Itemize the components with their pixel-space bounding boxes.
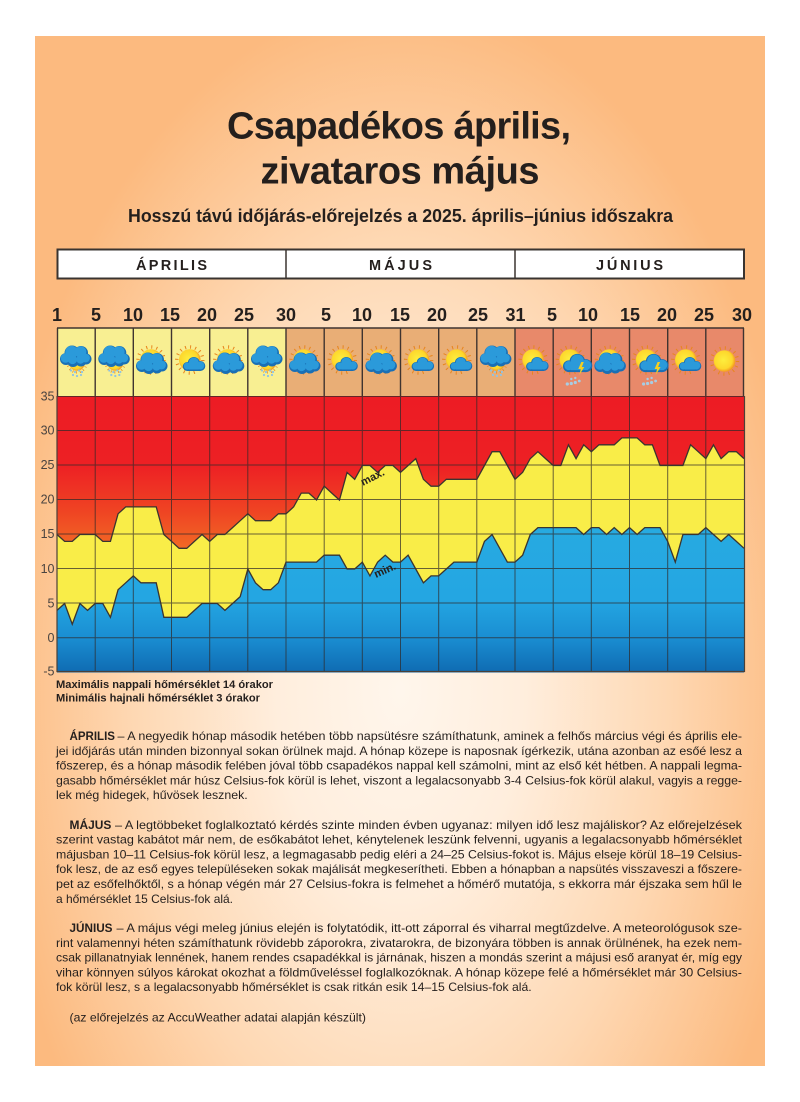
day number axis: 10 [352, 305, 372, 325]
temperature axis labels: 15 [41, 527, 55, 541]
day number axis: 25 [694, 305, 714, 325]
month header bar [58, 249, 744, 279]
temperature axis labels: 10 [41, 562, 55, 576]
temperature axis labels: 25 [41, 458, 55, 472]
text block: June: rint valamennyi héten számíthatunk rövidebb záporokra, zivatarokra, de bizonyára többen is annak örülnének, ha ezek nem- [56, 936, 742, 950]
day number axis: 10 [123, 305, 143, 325]
temperature axis labels: -5 [43, 664, 55, 678]
text block: April: lek még hidegek, hűvösek lesznek. [56, 788, 248, 802]
icon: mostly sunny, 20-25 May [444, 347, 472, 373]
grid [57, 396, 744, 671]
band: between maximum and minimum [57, 438, 744, 672]
icon: rain cloud, 25-30 April [251, 346, 282, 377]
day number axis: 20 [427, 305, 447, 325]
icon: mostly sunny, 15-20 April [177, 347, 205, 373]
title: zivataros május [260, 150, 540, 192]
subtitle: Hosszú távú időjárás-előrejelzés a 2025. április–június időszakra [128, 206, 674, 226]
text block: June: csak pillanatnyiak lennének, hanem rendes csapadékkal is járnának, hiszen a mondás szerint a májusi eső aranyat ér, míg egy [56, 951, 742, 965]
day number axis: 30 [276, 305, 296, 325]
temperature area chart [57, 396, 744, 672]
icon: cloudy, 10-15 April [136, 347, 168, 374]
text block: June [56, 920, 742, 994]
chart legend notes: Minimális hajnali hőmérséklet 3 órakor [56, 692, 261, 704]
day number axis: 5 [321, 305, 331, 325]
text block: June: JÚNIUS [70, 920, 112, 935]
text block: April: főszerep, és a hónap második felében jóval több csapadékos nappal kell számolni, mint az első két hétben. A nappali legma- [56, 759, 742, 773]
text block: April: jei időjárás után minden bizonnyal sokan örülnek majd. A hónap közepe is naposnak ígérkezik, utána azonban az esőé lesz a [55, 744, 742, 758]
day number axis: 30 [732, 305, 752, 325]
icon: mostly sunny, 15-20 May [406, 347, 434, 373]
month header bar: ÁPRILIS [136, 257, 207, 274]
temperature axis labels: 30 [41, 424, 55, 438]
temperature axis labels [41, 390, 55, 678]
text block: May: – A legtöbbeket foglalkoztató kérdés szinte minden évben ugyanaz: milyen idő lesz majáliskor? Az előrejelzések [115, 818, 743, 832]
day number axis: 1 [52, 305, 62, 325]
text block: June: fok körül lesz, s a legalacsonyabb hőmérséklet is csak ritkán esik 14–15 Celsius-fok alá. [56, 980, 532, 994]
day number axis: 25 [234, 305, 254, 325]
text block: April: – A negyedik hónap második hetében több napsütésre számíthatunk, aminek a felhős március végi és április ele- [118, 729, 742, 743]
temperature axis labels: 35 [41, 390, 55, 404]
band: above maximum [57, 396, 744, 672]
month header bar: JÚNIUS [596, 256, 663, 274]
temperature axis labels: 20 [41, 492, 55, 506]
text block: April: ÁPRILIS [70, 728, 115, 743]
icon: mostly sunny, 5-10 May [329, 347, 358, 373]
day number axis: 31 [505, 305, 526, 325]
icon: mostly sunny, 1-5 June [520, 347, 549, 373]
text block: June: vihar könnyen súlyos károkat okozhat a földműveléssel foglalkozóknak. A hónap közepe felé a hőmérséklet már 30 Celsius- [56, 965, 742, 979]
text block: April: gasabb hőmérséklet már húsz Celsius-fok körül is lehet, viszont a legalacsonyabb 3-4 Celsius-fok körül alakul, vagyis a regge- [56, 773, 742, 787]
day number axis: 20 [197, 305, 217, 325]
temperature axis labels: 5 [48, 596, 55, 610]
day number axis: 10 [578, 305, 598, 325]
icon: rain cloud, 5-10 April [98, 346, 130, 377]
icon: rain cloud, 1-5 April [60, 346, 92, 377]
day number axis: 15 [390, 305, 410, 325]
label: min: min. [372, 561, 398, 581]
label: max: max. [359, 467, 387, 489]
text block: May: a hőmérséklet 15 Celsius-fok alá. [56, 892, 233, 906]
text block: May: májusban 10–11 Celsius-fok körül lesz, a legmagasabb pedig eléri a 24–25 Celsius-fokot is. Május elseje körül 18–19 Celsius- [56, 847, 742, 861]
text block: May [56, 817, 743, 906]
day number axis: 15 [620, 305, 640, 325]
icon: thunderstorm, 5-10 June [557, 347, 592, 386]
icon: cloudy, 10-15 June [594, 347, 626, 374]
source note: (az előrejelzés az AccuWeather adatai alapján készült) [70, 1010, 366, 1024]
text block: May: MÁJUS [70, 817, 111, 832]
day number axis [52, 305, 752, 325]
chart legend notes [56, 679, 274, 704]
text block: May: szerint vastag kabátot már nem, de esőkabátot lehet, kénytelenek leszünk felvenni, ugyanis a legalacsonyabb hőmérséklet [56, 833, 743, 847]
icon: rain cloud, 25-31 May [480, 346, 511, 377]
day number axis: 15 [160, 305, 180, 325]
day number axis: 25 [468, 305, 488, 325]
text block: May: fok lesz, de az eső egyes településeken sokak majálisát megkeserítheti. Ebben a hónapban a napsütés visszaveszi a főszere- [56, 862, 742, 876]
day number axis: 20 [657, 305, 677, 325]
title: Csapadékos április, [227, 106, 571, 148]
chart frame [57, 396, 744, 672]
temperature axis labels: 0 [48, 631, 55, 645]
icon: cloudy, 10-15 May [365, 347, 397, 374]
day number axis: 5 [91, 305, 101, 325]
chart legend notes: Maximális nappali hőmérséklet 14 órakor [56, 679, 274, 691]
icon: cloudy, 20-25 April [213, 347, 244, 374]
month header bar: MÁJUS [369, 257, 432, 274]
weather icon strip [57, 328, 744, 396]
text block: June: – A május végi meleg június elején is folytatódik, itt-ott záporral és viharral megtűzdelve. A meteorológusok sze- [116, 921, 742, 935]
maximum temperature line [57, 438, 744, 548]
day number axis: 5 [547, 305, 557, 325]
text block: May: pet az esőfelhőktől, s a hónap végén már 27 Celsius-fokra is felmehet a hőmérő mutatója, s ekkorra már éjszaka sem hűl le [56, 877, 742, 891]
icon: mostly sunny, 20-25 June [673, 347, 701, 373]
band: below minimum [57, 528, 744, 672]
text block: April [55, 728, 742, 802]
icon: cloudy, 1-5 May [289, 347, 320, 374]
minimum temperature line [57, 528, 744, 624]
icon: sunny, 25-30 June [712, 348, 738, 374]
title [227, 106, 571, 192]
icon: thunderstorm, 15-20 June [634, 347, 669, 386]
